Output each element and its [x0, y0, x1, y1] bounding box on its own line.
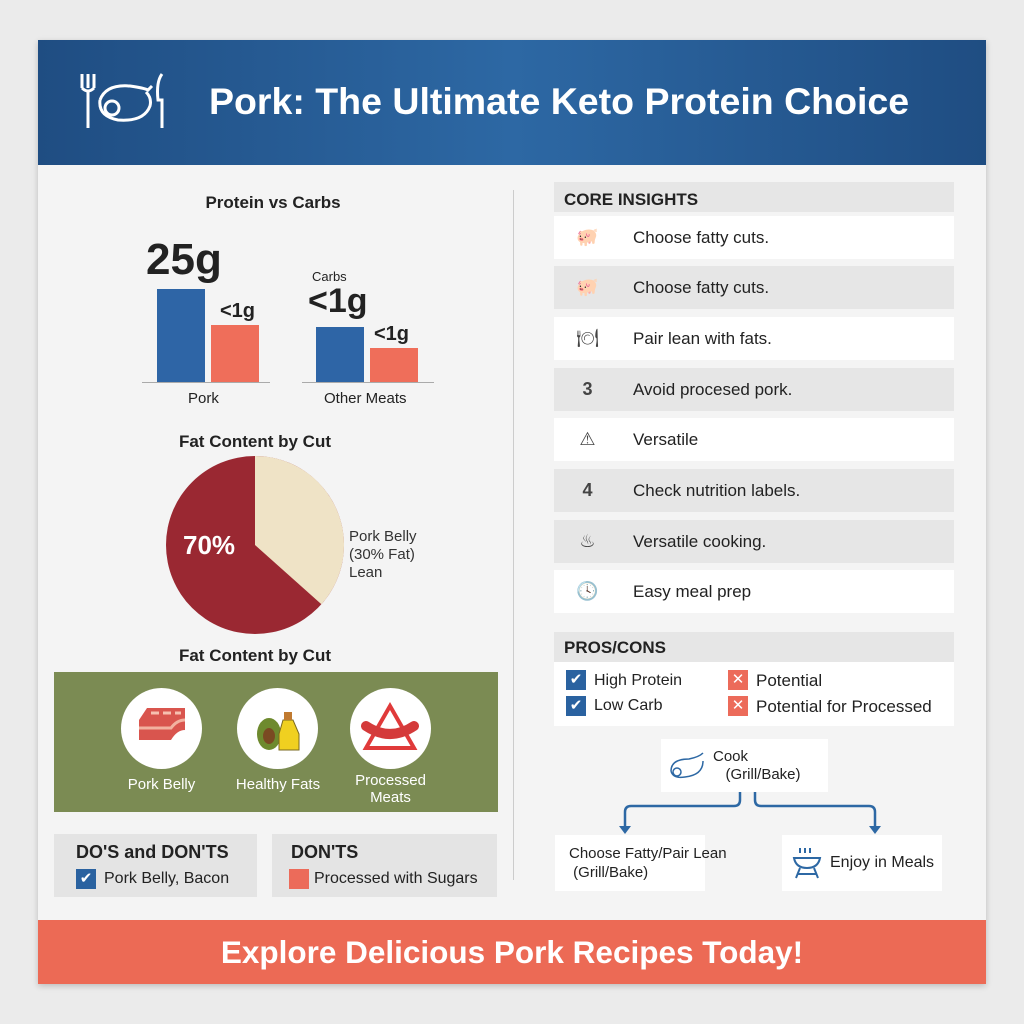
pie chart: fat content by cut: 70%: [183, 530, 235, 560]
flow: enjoy: Enjoy in Meals: [830, 854, 934, 871]
text: Versatile cooking.: [633, 532, 766, 550]
panel: food categories: Healthy Fats: [236, 776, 320, 793]
panel: pros/cons: ✕: [732, 697, 744, 714]
text: Pair lean with fats.: [633, 328, 772, 348]
panel: pros/cons: Potential: [756, 671, 822, 690]
panel: dos: DO'S and DON'TS: [76, 842, 229, 862]
text: 4: [582, 480, 592, 500]
bar chart: protein vs carbs: <1g: [308, 282, 368, 320]
panel: pros/cons: Low Carb: [594, 697, 662, 714]
pie chart: fat content by cut: (30% Fat): [349, 546, 415, 563]
text: 🐖: [576, 277, 599, 297]
panel: donts: [272, 834, 497, 897]
panel: dos: ✔: [80, 870, 92, 887]
bar chart: protein vs carbs: Other Meats: [324, 390, 407, 407]
title: Pork: The Ultimate Keto Protein Choice: [209, 80, 909, 122]
flow: choose fatty: [555, 835, 705, 891]
text: Versatile: [633, 430, 698, 448]
flow: cook: (Grill/Bake): [726, 766, 801, 782]
insight rows: Choose fatty cuts.: [633, 228, 769, 246]
icon: pork belly: [121, 688, 202, 769]
pie chart: fat content by cut: Lean: [349, 564, 382, 581]
bar chart: protein vs carbs: Protein vs Carbs: [205, 193, 341, 212]
text: 🍽: [576, 328, 599, 348]
text: Avoid procesed pork.: [633, 380, 792, 398]
panel: food categories: [54, 672, 498, 812]
text: 🕓: [576, 581, 599, 601]
text: Check nutrition labels.: [633, 480, 800, 500]
panel: donts: DON'TS: [291, 842, 358, 862]
panel: food categories: Meats: [370, 789, 411, 806]
footer banner: [38, 920, 986, 984]
panel: food categories: Pork Belly: [128, 776, 195, 793]
pie chart: fat content by cut: [166, 432, 417, 634]
panel: pros/cons: High Protein: [594, 672, 682, 689]
text: ♨: [579, 531, 596, 551]
bar chart: protein vs carbs: Carbs: [312, 269, 347, 284]
pie chart: fat content by cut: Fat Content by Cut: [179, 432, 331, 451]
bar chart: protein vs carbs: Pork: [188, 390, 219, 407]
panel: pros/cons: Potential for Processed: [756, 697, 932, 716]
bar chart: protein vs carbs: [142, 193, 434, 407]
panel: pros/cons: [554, 632, 954, 726]
flow: cook: [661, 739, 828, 792]
heading: fat content by cut 2: Fat Content by Cut: [179, 646, 331, 665]
insight rows: 🐖: [576, 227, 599, 247]
insight rows: [554, 216, 954, 259]
text: Choose fatty cuts.: [633, 278, 769, 296]
text: ⚠: [579, 429, 596, 449]
panel: pros/cons: ✔: [570, 697, 582, 714]
flow: enjoy: [782, 835, 942, 891]
panel: pros/cons: PROS/CONS: [564, 638, 666, 657]
pie chart: fat content by cut: Pork Belly: [349, 528, 417, 545]
panel: dos: Pork Belly, Bacon: [104, 870, 229, 887]
icon: processed meats: [350, 688, 431, 769]
text: 3: [582, 379, 592, 399]
flow: cook: Cook: [713, 748, 748, 764]
flow: choose fatty: (Grill/Bake): [573, 864, 648, 881]
icon: healthy fats: [237, 688, 318, 769]
bar chart: protein vs carbs: <1g: [220, 300, 255, 322]
panel: pros/cons: ✕: [732, 671, 744, 688]
footer banner: Explore Delicious Pork Recipes Today!: [221, 934, 803, 970]
panel: pros/cons: ✔: [570, 671, 582, 688]
flow: choose fatty: Choose Fatty/Pair Lean: [569, 845, 727, 862]
divider: [513, 190, 514, 880]
panel: dos: [54, 834, 257, 897]
bar chart: protein vs carbs: <1g: [374, 323, 409, 345]
text: Easy meal prep: [633, 582, 751, 600]
panel: food categories: Processed: [355, 772, 426, 789]
icon: fork, pork, knife: [80, 73, 164, 128]
header: [38, 40, 986, 165]
arrows: [619, 792, 881, 834]
bar chart: protein vs carbs: 25g: [146, 235, 222, 284]
panel: core insights: CORE INSIGHTS: [564, 190, 698, 209]
panel: donts: Processed with Sugars: [314, 870, 478, 887]
